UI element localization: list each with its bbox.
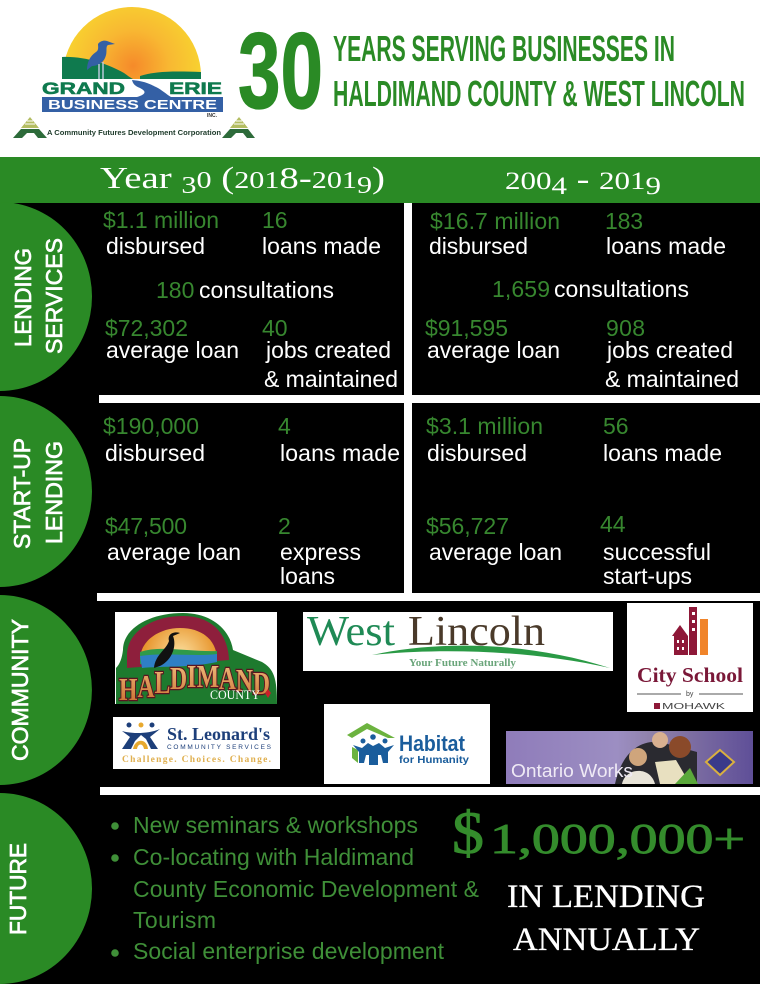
panel: lending 2004-2019: jobs created <box>606 337 733 363</box>
logo: Ontario Works <box>506 731 753 784</box>
tab: start-up lending: LENDING <box>41 441 67 544</box>
tab: start-up lending <box>0 396 92 587</box>
tab: lending services <box>0 202 92 391</box>
panel: start-up 2004-2019 <box>426 413 722 589</box>
future bullet list: Co-locating with Haldimand <box>133 844 414 870</box>
panel: start-up year 30 <box>103 413 400 589</box>
logo: Haldimand County: HALDIMAND <box>119 660 270 708</box>
future bullet list <box>111 812 479 964</box>
column header band: 4 <box>551 173 568 200</box>
panel: start-up 2004-2019: start-ups <box>603 563 692 589</box>
logo: St. Leonard's <box>113 717 280 769</box>
panel: lending year 30: consultations <box>199 277 334 303</box>
panel: lending year 30: 180 <box>156 277 194 303</box>
panel: start-up year 30: average loan <box>107 539 241 565</box>
logo: Habitat for Humanity: Habitat <box>399 731 466 756</box>
column header band: 3 <box>181 173 196 199</box>
logo: Haldimand County: COUNTY <box>210 687 261 702</box>
panel: lending year 30: $72,302 <box>105 315 188 341</box>
panel: lending 2004-2019: $91,595 <box>425 315 508 341</box>
panel: lending 2004-2019: loans made <box>606 233 726 259</box>
column header band: 9 <box>357 173 372 199</box>
tab: lending services: LENDING <box>10 248 36 347</box>
future bullet list: New seminars & workshops <box>133 812 418 838</box>
panel: start-up year 30: $190,000 <box>103 413 199 439</box>
panel: start-up year 30: express <box>280 539 361 565</box>
lending caption: ANNUALLY <box>513 922 700 958</box>
logo: City School by Mohawk: City School <box>637 663 743 687</box>
logo: West Lincoln: West <box>307 609 395 655</box>
panel: lending year 30: jobs created <box>265 337 391 363</box>
logo: Grand Erie Business Centre: ERIE <box>169 79 222 98</box>
panel: lending 2004-2019: $16.7 million <box>430 208 560 234</box>
logo: Grand Erie Business Centre: BUSINESS CENTRE <box>48 97 217 112</box>
panel: lending year 30: 40 <box>262 315 288 341</box>
column header band: Year <box>100 160 157 195</box>
logo: Grand Erie Business Centre <box>13 7 255 138</box>
big lending figure: 1,000,000+ <box>490 817 745 863</box>
panel: start-up 2004-2019: $3.1 million <box>426 413 543 439</box>
panel: lending year 30: average loan <box>106 337 239 363</box>
big number 30: 30 <box>238 10 323 131</box>
column header band: - <box>567 161 599 196</box>
panel: lending year 30: $1.1 million <box>103 207 219 233</box>
panel: start-up 2004-2019: 56 <box>603 413 629 439</box>
panel: lending 2004-2019: disbursed <box>429 233 528 259</box>
column header band: ) <box>372 160 385 195</box>
logo: City School by Mohawk: by <box>686 691 694 698</box>
panel: lending year 30: 16 <box>262 207 288 233</box>
panel: lending 2004-2019: average loan <box>427 337 560 363</box>
column header band: 0 <box>196 168 212 194</box>
logo: St. Leonard's: COMMUNITY SERVICES <box>167 744 272 751</box>
logo: West Lincoln: Your Future Naturally <box>409 658 517 669</box>
tab: future <box>0 793 92 984</box>
panel: lending 2004-2019: 183 <box>605 208 643 234</box>
panel: lending year 30 <box>103 207 398 392</box>
logo: Grand Erie Business Centre: INC. <box>207 113 218 119</box>
tab: future: FUTURE <box>5 843 31 935</box>
white dividers <box>97 203 760 791</box>
panel: start-up 2004-2019: average loan <box>429 539 562 565</box>
future bullet list: Tourism <box>133 907 216 933</box>
tab: start-up lending: START-UP <box>9 438 35 549</box>
panel: start-up year 30: 4 <box>278 413 291 439</box>
panel: lending 2004-2019: consultations <box>554 276 689 302</box>
logo: Grand Erie Business Centre: A Community Futures Development Corporation <box>47 128 221 137</box>
panel: start-up year 30: 2 <box>278 513 291 539</box>
panel: start-up year 30: disbursed <box>105 440 205 466</box>
panel: lending 2004-2019: 1,659 <box>492 276 550 302</box>
logo: Ontario Works: Ontario Works <box>511 760 633 781</box>
logo: Habitat for Humanity: for Humanity <box>399 754 469 766</box>
logo: St. Leonard's: St. Leonard's <box>167 724 270 744</box>
column header band: (201 8- 201 <box>219 160 348 195</box>
panel: start-up 2004-2019: $56,727 <box>426 513 509 539</box>
logo: Habitat for Humanity <box>324 704 490 784</box>
logo: City School by Mohawk <box>627 603 753 712</box>
tab: community <box>0 595 92 785</box>
logo: Haldimand County <box>115 612 277 708</box>
column header band <box>0 157 760 203</box>
panel: start-up 2004-2019: loans made <box>603 440 722 466</box>
header panel <box>0 0 760 157</box>
tab: lending services: SERVICES <box>41 238 67 354</box>
panel: start-up 2004-2019: 44 <box>600 511 626 537</box>
lending caption: IN LENDING <box>507 879 705 915</box>
panel: lending 2004-2019: & maintained <box>605 366 739 392</box>
logo: St. Leonard's: Challenge. Choices. Change. <box>122 755 271 765</box>
panel: lending year 30: loans made <box>262 233 381 259</box>
panel: lending 2004-2019 <box>425 208 739 392</box>
panel: start-up 2004-2019: disbursed <box>427 440 527 466</box>
tab: community: COMMUNITY <box>7 619 33 761</box>
logo: City School by Mohawk: MOHAWK <box>662 702 726 711</box>
panel: start-up year 30: loans made <box>280 440 400 466</box>
panel: start-up year 30: $47,500 <box>105 513 187 539</box>
big lending figure: $ <box>452 800 484 866</box>
logo: West Lincoln: Lincoln <box>408 609 545 655</box>
panel: lending 2004-2019: 908 <box>606 315 645 341</box>
column header band: 201 <box>599 168 646 195</box>
headline <box>333 28 745 114</box>
lending caption <box>507 879 705 958</box>
column header band: 9 <box>646 173 661 200</box>
panel: lending year 30: & maintained <box>264 366 398 392</box>
logo: Grand Erie Business Centre: GRAND <box>42 79 125 98</box>
future bullet list: County Economic Development & <box>133 876 479 902</box>
future bullet list: Social enterprise development <box>133 938 445 964</box>
column header band: 200 <box>505 168 551 195</box>
panel: lending year 30: disbursed <box>106 233 205 259</box>
panel: start-up 2004-2019: successful <box>603 539 711 565</box>
panel: start-up year 30: loans <box>280 563 335 589</box>
logo: West Lincoln <box>303 609 613 671</box>
